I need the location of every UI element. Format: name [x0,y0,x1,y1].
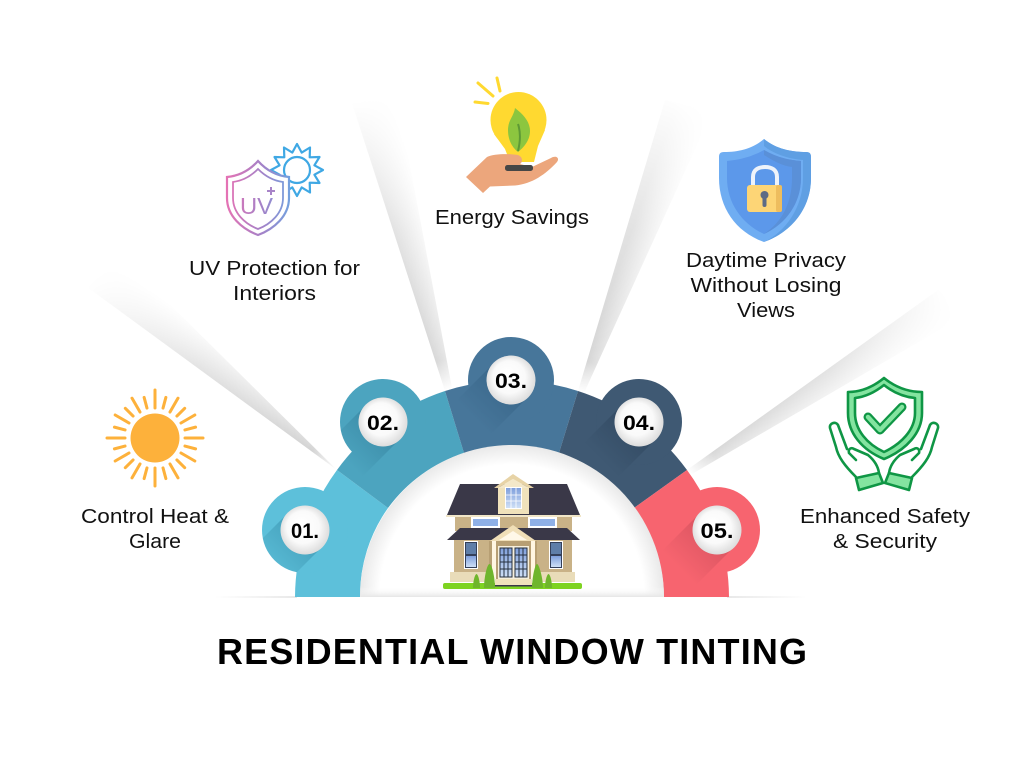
badge 02 [358,398,408,446]
icon: house [443,474,582,589]
hand [466,154,558,193]
icon: sun [107,390,203,486]
doors [498,546,529,579]
upper windows [471,517,500,528]
segment 03 [445,337,578,453]
light ray: item 02 [364,140,450,384]
icon: light bulb in hand [466,78,558,193]
bushes [484,564,495,588]
badge 05 [692,506,742,554]
light ray: item 01 [121,311,332,466]
badge 05: 05. [700,520,734,543]
lattice base [450,572,493,582]
grass [443,583,582,589]
label: Enhanced Safety & Security: Enhanced Safety [800,506,970,528]
label: Enhanced Safety & Security [800,506,970,553]
label: Control Heat & Glare: Control Heat & [81,506,230,528]
icon: UV shield: UV [240,193,274,219]
light ray: item 03 [580,133,670,386]
leaf [508,108,530,152]
badge 04 [614,398,664,446]
segment 01 [262,470,388,597]
portico [490,525,536,541]
label: Enhanced Safety & Security: & Security [833,531,937,553]
badge 01 [280,506,330,554]
icon: privacy shield with padlock [719,139,811,242]
walls [455,516,572,531]
label: Daytime Privacy Without Losing Views [686,250,846,322]
icon: safety shield with hands [830,378,938,490]
floor shadow line [215,596,807,598]
badge 01: 01. [291,520,319,543]
segment 05 [634,470,760,607]
badge 04: 04. [623,412,655,435]
label: Control Heat & Glare [81,506,230,553]
light ray: item 04 [693,312,908,470]
label: Control Heat & Glare: Glare [129,531,181,553]
label: UV Protection for Interiors: Interiors [233,283,316,305]
label: UV Protection for Interiors [189,258,360,305]
badge 03 [486,356,536,404]
label: UV Protection for Interiors: UV Protection for [189,258,360,280]
steps [495,579,532,585]
inner arch shading [360,445,664,597]
icon: UV shield [227,144,323,235]
dormer [498,487,529,514]
label: Energy Savings: Energy Savings [435,207,589,229]
title: RESIDENTIAL WINDOW TINTING [217,631,807,672]
label: Daytime Privacy Without Losing Views: Daytime Privacy [686,250,846,272]
badge 03: 03. [495,370,527,393]
label: Daytime Privacy Without Losing Views: Views [737,300,795,322]
panel: semicircle segments [245,337,760,607]
upper roof [447,484,580,515]
lower roof [447,528,580,540]
side windows [464,541,478,569]
label: Daytime Privacy Without Losing Views: Without Losing [690,275,842,297]
segment 04 [559,379,687,508]
segment 02 [337,379,464,508]
badge 02: 02. [367,412,399,435]
